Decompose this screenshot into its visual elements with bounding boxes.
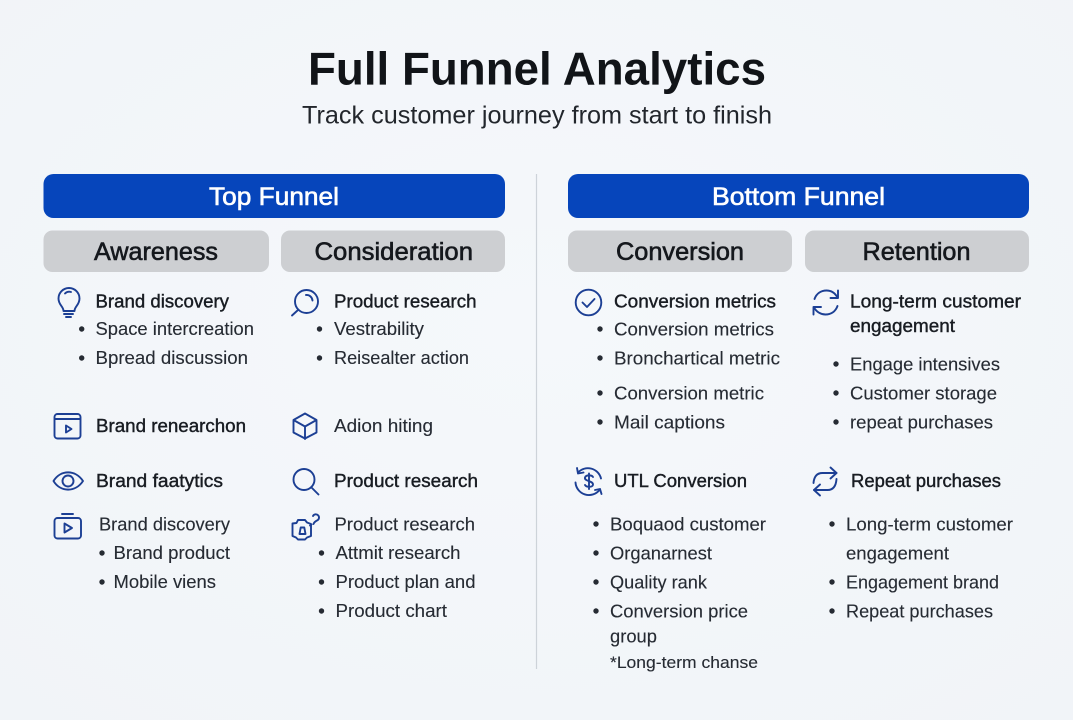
text: brand faatytics: Brand faatytics <box>96 471 223 491</box>
text block: brand discovery list: Brand product <box>114 543 230 563</box>
text block: brand discovery list: Mobile viens <box>114 572 216 592</box>
text block: conversion metrics <box>597 292 780 432</box>
text block: long-term customer engagement: Long-term customer <box>850 292 1021 312</box>
text block: long-term customer engagement <box>833 292 1021 432</box>
text block: product research list: Attmit research <box>336 543 460 563</box>
text block: repeat purchases list: Long-term customer <box>846 515 1013 535</box>
text block: utl conversion list: Quality rank <box>610 572 708 592</box>
icon: gear with question mark <box>292 514 319 540</box>
text block: product research: Vestrability <box>334 319 424 339</box>
text block: brand discovery <box>79 292 254 368</box>
column heading: conversion: Conversion <box>616 238 744 266</box>
text block: long-term customer engagement: Engage intensives <box>850 354 1000 374</box>
heading: top funnel <box>44 174 505 218</box>
text block: utl conversion list: Boquaod customer <box>610 515 766 535</box>
text: adion hiting: Adion hiting <box>334 416 433 436</box>
column heading: conversion <box>568 230 792 272</box>
heading: bottom funnel: Bottom Funnel <box>712 183 885 211</box>
text block: repeat purchases list <box>829 515 1013 622</box>
text block: brand discovery list: Brand discovery <box>99 515 230 535</box>
text block: brand discovery: Space intercreation <box>96 319 254 339</box>
text block: conversion metrics: Conversion metrics <box>614 320 774 340</box>
text: repeat purchases: Repeat purchases <box>851 471 1001 491</box>
text block: conversion metrics: Bronchartical metric <box>614 348 780 368</box>
text block: brand discovery: Bpread discussion <box>96 348 248 368</box>
text block: utl conversion list: Organarnest <box>610 544 712 564</box>
text block: long-term customer engagement: engagement <box>850 316 955 336</box>
column heading: retention <box>805 230 1029 272</box>
text block: utl conversion list: group <box>610 626 657 646</box>
text block: repeat purchases list: Repeat purchases <box>846 602 993 622</box>
icon: magnifier <box>292 290 318 316</box>
heading: bottom funnel <box>568 174 1029 218</box>
text block: conversion metrics: Conversion metric <box>614 384 764 404</box>
text block: product research list: Product research <box>334 515 475 535</box>
text block: long-term customer engagement: repeat purchases <box>850 412 993 432</box>
icon: dollar cycle <box>576 468 602 495</box>
panel: top funnel <box>44 174 505 621</box>
text block: brand discovery list <box>99 515 230 592</box>
text block: product research list: Product chart <box>336 601 447 621</box>
column heading: consideration: Consideration <box>314 238 473 266</box>
text block: conversion metrics: Conversion metrics <box>614 292 776 312</box>
text block: long-term customer engagement: Customer storage <box>850 384 997 404</box>
text block: product research list: Product plan and <box>336 572 476 592</box>
text: utl conversion: UTL Conversion <box>614 471 747 491</box>
column heading: retention: Retention <box>862 238 970 266</box>
icon: repeat arrows <box>814 468 836 496</box>
icon: light bulb <box>58 288 80 317</box>
text block: utl conversion list: Conversion price <box>610 602 748 622</box>
icon: eye <box>54 472 83 490</box>
column heading: consideration <box>281 230 505 272</box>
icon: refresh <box>814 290 838 314</box>
text block: utl conversion list: *Long-term chanse <box>610 653 758 672</box>
icon: check circle <box>576 290 601 315</box>
icon: play screen <box>54 514 81 538</box>
text block: product research: Reisealter action <box>334 348 469 368</box>
text block: utl conversion list <box>593 515 766 672</box>
column heading: awareness: Awareness <box>94 238 218 266</box>
icon: video window <box>54 414 80 438</box>
text block: conversion metrics: Mail captions <box>614 412 725 432</box>
text block: product research: Product research <box>334 292 476 312</box>
icon: search <box>294 469 318 494</box>
heading: top funnel: Top Funnel <box>209 183 339 211</box>
icon: cube <box>294 414 316 439</box>
column heading: awareness <box>44 230 269 272</box>
subtitle: Track customer journey from start to finish <box>302 102 772 130</box>
text block: product research list <box>319 515 476 621</box>
text block: repeat purchases list: engagement <box>846 544 949 564</box>
text block: brand discovery: Brand discovery <box>96 292 229 312</box>
text: product research: Product research <box>334 471 478 491</box>
text: brand renearchon: Brand renearchon <box>96 416 246 436</box>
panel: bottom funnel <box>568 174 1029 672</box>
text block: product research <box>317 292 476 368</box>
text block: repeat purchases list: Engagement brand <box>846 572 999 592</box>
title: Full Funnel Analytics <box>308 42 766 94</box>
